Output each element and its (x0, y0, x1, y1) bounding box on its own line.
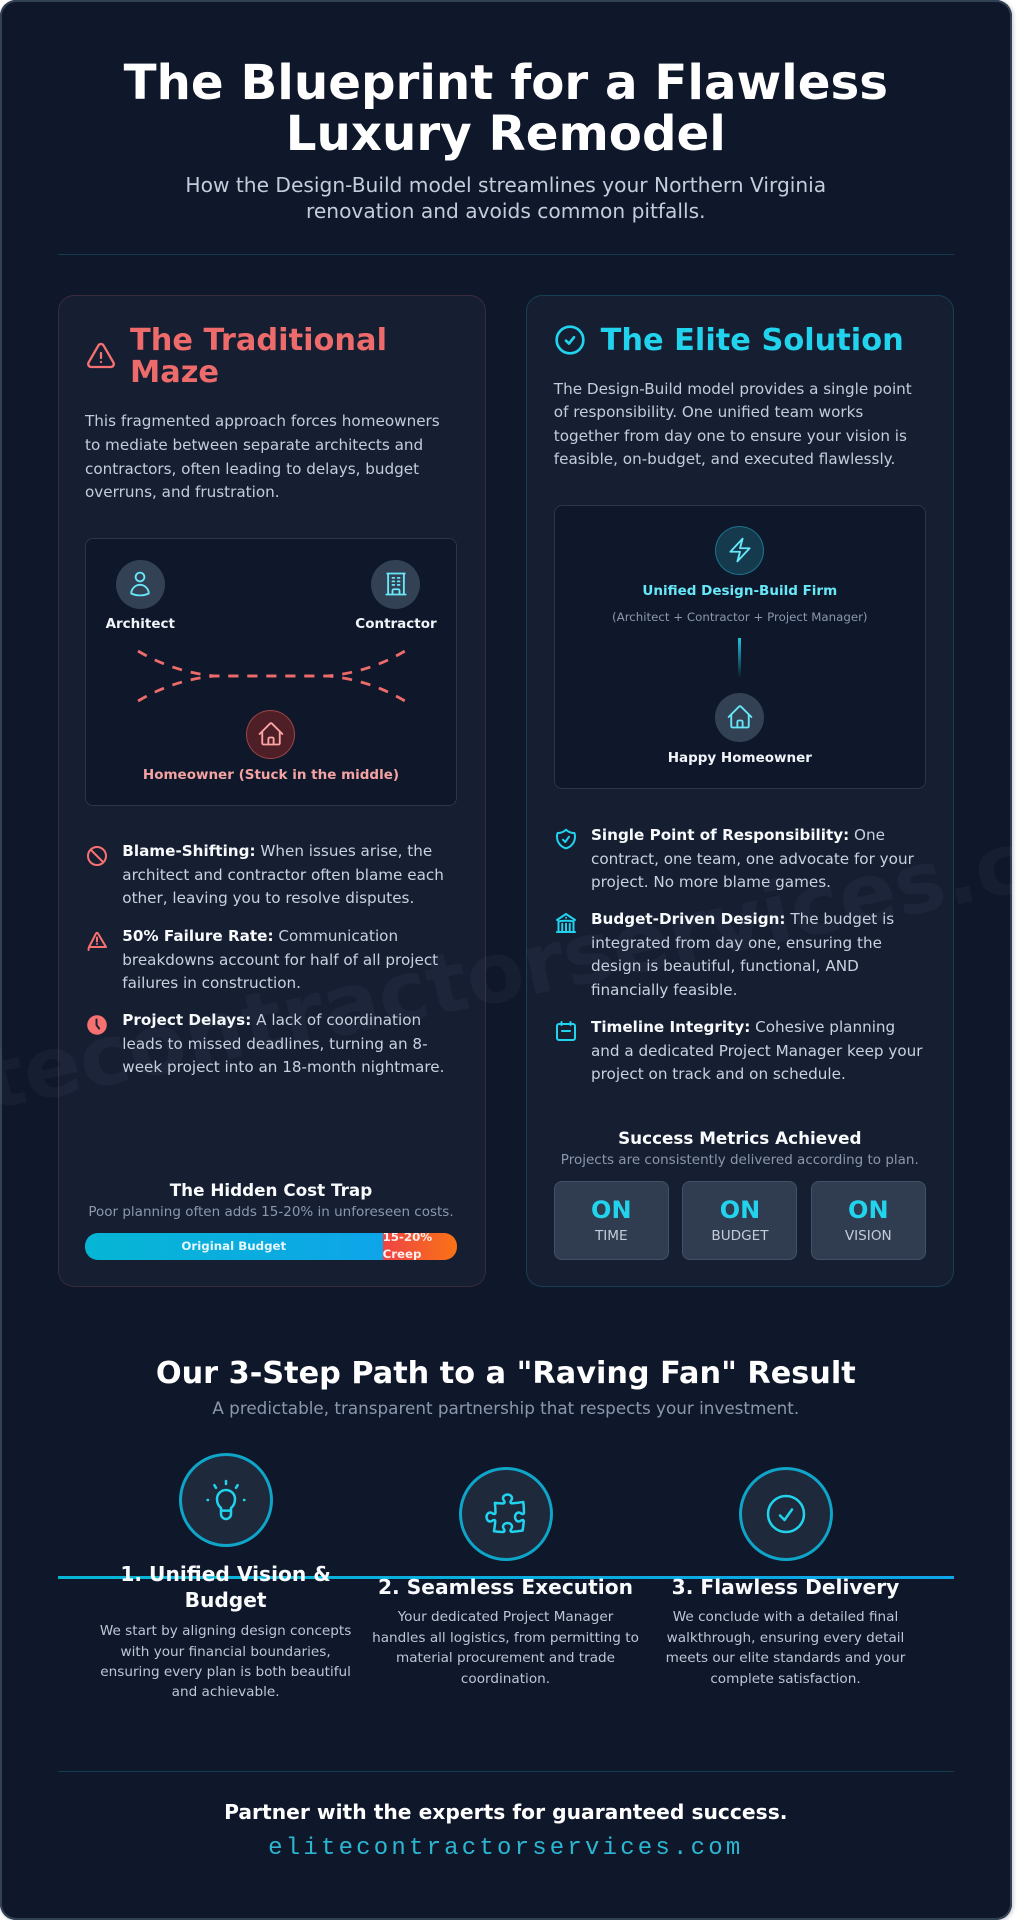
intro text: to mediate between separate architects and (85, 436, 423, 454)
list item: timeline integrity (591, 1018, 923, 1083)
icon: calendar (556, 1021, 576, 1041)
diagram: unified firm (554, 505, 926, 789)
node: design-build firm: Unified Design-Build Firm (642, 583, 837, 599)
metric card: on vision: ON (848, 1196, 889, 1224)
list item: failure rate: breakdowns account for half of all project (122, 951, 438, 969)
step title: Budget (185, 1588, 267, 1612)
step description: meets our elite standards and your (666, 1650, 905, 1666)
title: The Blueprint for a Flawless (124, 55, 888, 111)
arrow: connector (738, 638, 741, 678)
intro text: This fragmented approach forces homeowners (85, 412, 440, 430)
list item: timeline integrity: project on track and on schedule. (591, 1065, 846, 1083)
metric card: on vision: VISION (845, 1228, 892, 1244)
node: contractor (355, 560, 437, 632)
icon: shield check (556, 828, 576, 850)
step description (100, 1623, 351, 1700)
heading: the traditional maze: The Traditional (130, 323, 387, 358)
step title: 2. Seamless Execution (378, 1575, 633, 1599)
list item: project delays: week project into an 18-month nightmare. (122, 1058, 444, 1076)
node: homeowner stuck (143, 710, 399, 783)
section heading: 3-step path: Our 3-Step Path to a "Raving Fan" Result (156, 1356, 856, 1391)
metrics: success metrics achieved: Success Metrics Achieved (618, 1128, 861, 1148)
step description (372, 1609, 639, 1687)
list item: single point of responsibility: contract, one team, one advocate for your (591, 850, 914, 868)
metrics: success metrics achieved (554, 1128, 926, 1260)
icon: check circle (738, 1467, 832, 1561)
intro text (554, 380, 912, 468)
icon: warning triangle (87, 342, 115, 368)
intro text: feasible, on-budget, and executed flawlessly. (554, 450, 895, 468)
intro text: together from day one to ensure your vision is (554, 427, 907, 445)
step description: ensuring every plan is both beautiful (100, 1664, 351, 1680)
subtitle (185, 172, 826, 223)
icon: failure triangle (88, 932, 107, 951)
metric card: on budget: ON (720, 1196, 760, 1224)
list item: blame-shifting (122, 842, 444, 907)
chart: hidden cost trap: Poor planning often adds 15-20% in unforeseen costs. (88, 1204, 454, 1220)
list item: single point of responsibility (591, 826, 914, 891)
heading: the traditional maze (130, 323, 387, 390)
metric card: on time: TIME (595, 1228, 628, 1244)
node: contractor: Contractor (355, 616, 437, 632)
list item: budget-driven design: integrated from day one, ensuring the (591, 934, 882, 952)
icon: puzzle piece (458, 1467, 552, 1561)
step description: We conclude with a detailed final (673, 1609, 898, 1625)
list item: project delays (122, 1011, 444, 1076)
metric card: on time: ON (591, 1196, 632, 1224)
step description: complete satisfaction. (710, 1671, 861, 1687)
footer website: elitecontractorservices.com (268, 1835, 743, 1862)
diagram: fragmented parties (85, 538, 457, 806)
intro text: of responsibility. One unified team works (554, 403, 863, 421)
step 3 (666, 1467, 906, 1687)
step description: handles all logistics, from permitting to (372, 1630, 639, 1646)
step description: coordination. (461, 1671, 550, 1687)
metric card: on vision (811, 1181, 926, 1260)
node: architect (106, 560, 175, 632)
node: design-build firm: (Architect + Contractor + Project Manager) (612, 610, 868, 624)
metric card: on budget (682, 1181, 797, 1260)
list item: project delays: Project Delays: A lack of coordination (122, 1011, 421, 1029)
list item: blame-shifting: other, leaving you to resolve disputes. (122, 889, 414, 907)
icon: clock (87, 1015, 107, 1035)
step description: We start by aligning design concepts (100, 1623, 351, 1639)
list item: project delays: leads to missed deadlines, turning an 8- (122, 1035, 428, 1053)
list item: blame-shifting: Blame-Shifting: When issues arise, the (122, 842, 432, 860)
node: homeowner stuck: Homeowner (Stuck in the middle) (143, 767, 399, 783)
step description: with your financial boundaries, (121, 1644, 331, 1660)
step description (666, 1609, 906, 1687)
node: architect: Architect (106, 616, 175, 632)
step description: and achievable. (172, 1684, 280, 1700)
panel: the traditional maze (58, 295, 486, 1287)
node: happy homeowner: Happy Homeowner (668, 750, 812, 766)
footer call to action: Partner with the experts for guaranteed success. (224, 1800, 787, 1824)
list item: blame-shifting: architect and contractor often blame each (122, 866, 444, 884)
list item: timeline integrity: and a dedicated Project Manager keep your (591, 1042, 923, 1060)
budget bar: Original Budget (181, 1239, 286, 1253)
list item: budget-driven design: design is beautiful, functional, AND (591, 957, 859, 975)
list item: failure rate: failures in construction. (122, 974, 301, 992)
metric card: on budget: BUDGET (711, 1228, 769, 1244)
panel: the elite solution (526, 295, 954, 1287)
step description: Your dedicated Project Manager (398, 1609, 613, 1625)
heading: the traditional maze: Maze (130, 355, 219, 390)
dashed conflict lines (137, 650, 406, 702)
chart: hidden cost trap: The Hidden Cost Trap (170, 1180, 372, 1200)
step title: 3. Flawless Delivery (672, 1575, 899, 1599)
step description: material procurement and trade (396, 1650, 615, 1666)
metrics: success metrics achieved: Projects are consistently delivered according to plan. (561, 1152, 919, 1168)
title (124, 55, 888, 162)
intro text: overruns, and frustration. (85, 483, 280, 501)
node: happy homeowner (668, 693, 812, 766)
metric card: on time (554, 1181, 669, 1260)
section subtitle: A predictable, transparent partnership that respects your investment. (212, 1398, 799, 1418)
node: design-build firm (612, 526, 868, 624)
list item: failure rate (122, 927, 438, 992)
budget bar (85, 1233, 457, 1260)
list item: timeline integrity: Timeline Integrity: Cohesive planning (591, 1018, 895, 1036)
icon: light bulb (179, 1453, 273, 1547)
step title: 1. Unified Vision & (120, 1562, 331, 1586)
subtitle: renovation and avoids common pitfalls. (306, 199, 706, 223)
list item: single point of responsibility: project. No more blame games. (591, 873, 831, 891)
intro text: The Design-Build model provides a single point (554, 380, 912, 398)
icon: check circle (555, 325, 585, 355)
list item: single point of responsibility: Single Point of Responsibility: One (591, 826, 885, 844)
list item: failure rate: 50% Failure Rate: Communication (122, 927, 398, 945)
heading: the elite solution: The Elite Solution (601, 323, 904, 358)
step 2 (372, 1467, 639, 1687)
intro text (84, 412, 440, 501)
subtitle: How the Design-Build model streamlines your Northern Virginia (185, 172, 826, 196)
icon: no symbol (87, 846, 107, 866)
list item: budget-driven design: financially feasible. (591, 981, 737, 999)
title: Luxury Remodel (286, 106, 726, 162)
icon: bank (556, 913, 576, 933)
intro text: contractors, often leading to delays, budget (85, 460, 419, 478)
step 1 (100, 1453, 351, 1700)
timeline line (58, 1576, 954, 1579)
chart: hidden cost trap (85, 1180, 457, 1260)
list item: budget-driven design: Budget-Driven Design: The budget is (591, 910, 894, 928)
step description: walkthrough, ensuring every detail (667, 1630, 904, 1646)
list item: budget-driven design (591, 910, 894, 999)
step title (120, 1562, 331, 1612)
